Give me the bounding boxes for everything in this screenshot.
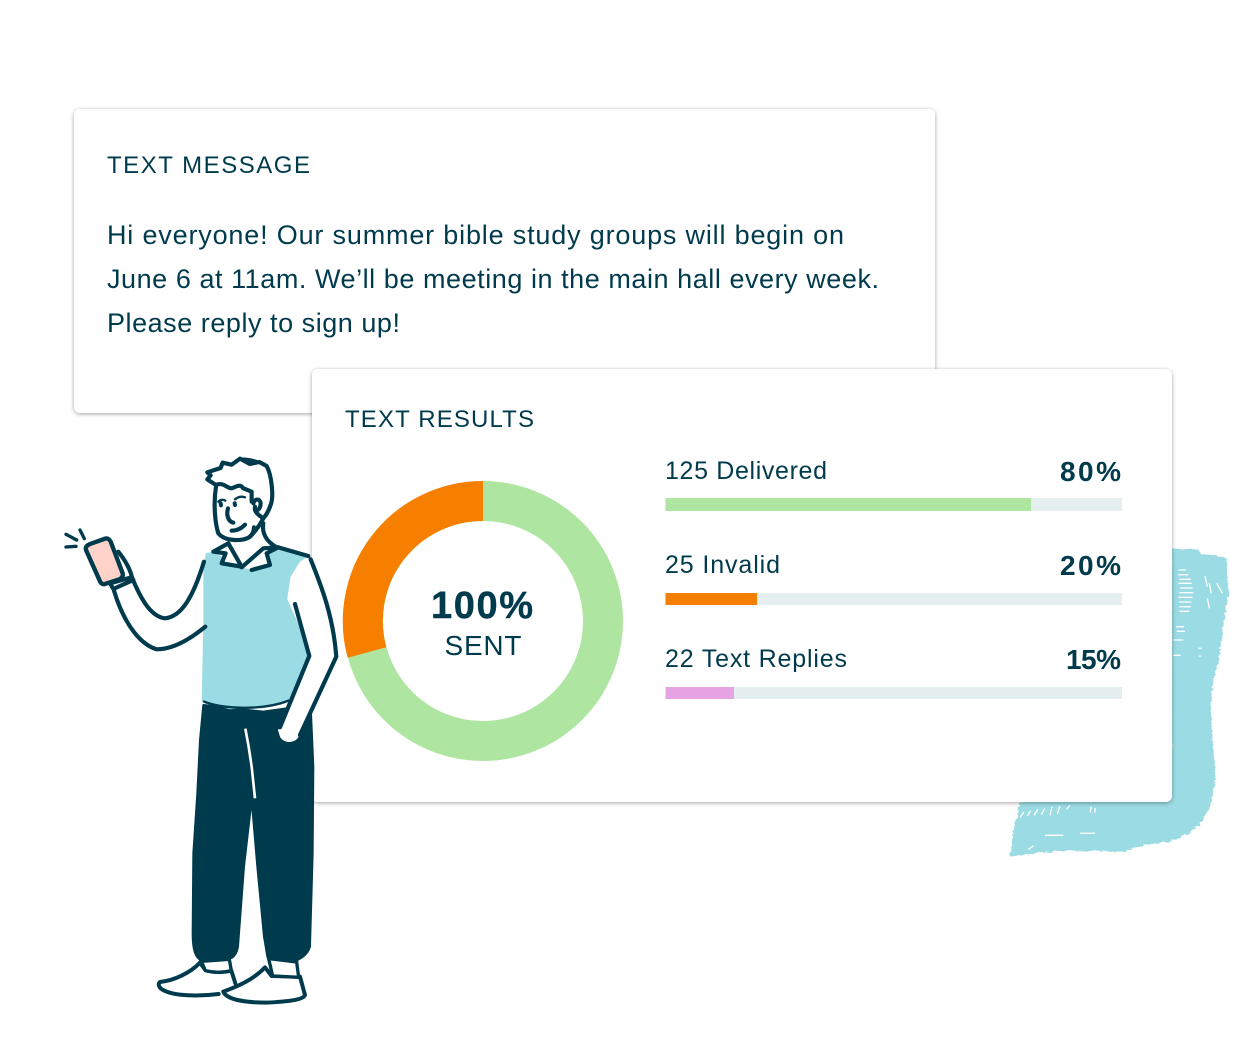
left arm: [114, 563, 203, 649]
donut centre label: SENT: [444, 630, 522, 661]
right arm outlines: [300, 559, 336, 735]
donut centre value: 100%: [431, 585, 533, 627]
bar: text replies: 15%: [1066, 644, 1121, 675]
eyes: [215, 503, 227, 505]
fingers: [118, 552, 132, 577]
cuff: [110, 577, 133, 589]
bar: invalid: 25 Invalid: [665, 551, 780, 579]
trousers: [159, 705, 313, 1003]
phone signal marks: [66, 530, 84, 547]
bar: invalid: 20%: [1060, 550, 1121, 581]
trouser crease: [245, 729, 255, 798]
bar: delivered: [665, 456, 1122, 511]
left shoe: [159, 963, 235, 995]
bar: delivered: 125 Delivered: [665, 457, 827, 485]
phone: [86, 538, 123, 584]
face: [215, 459, 271, 540]
panel: text message: [74, 109, 935, 413]
left sock: [201, 959, 231, 972]
right arm: [278, 557, 337, 742]
neck: [213, 520, 280, 568]
message body: [107, 220, 879, 338]
bar: delivered: 80%: [1060, 456, 1121, 487]
message body: Hi everyone! Our summer bible study groups will begin on: [107, 220, 844, 250]
smile: [232, 525, 245, 531]
nose: [227, 508, 233, 523]
bar: text replies: [665, 644, 1122, 699]
bar: text replies: 22 Text Replies: [665, 645, 847, 673]
hair: [207, 459, 272, 518]
illustration: man holding phone: [66, 459, 337, 1003]
message body: June 6 at 11am. We’ll be meeting in the main hall every week.: [107, 264, 879, 294]
right shoe: [223, 967, 305, 1003]
right sock: [269, 959, 299, 977]
panel: text results: [312, 369, 1172, 802]
donut chart: [363, 501, 603, 741]
heading: text results: TEXT RESULTS: [345, 406, 534, 433]
collar: [213, 543, 242, 567]
vest: [202, 548, 310, 709]
heading: text message: TEXT MESSAGE: [107, 152, 310, 179]
brush stroke background: [1010, 548, 1228, 857]
message body: Please reply to sign up!: [107, 308, 400, 338]
vest hem: [204, 701, 289, 708]
bar: invalid: [665, 550, 1122, 605]
left arm outlines: [132, 562, 204, 618]
jaw line: [250, 527, 254, 537]
ear: [253, 500, 261, 510]
